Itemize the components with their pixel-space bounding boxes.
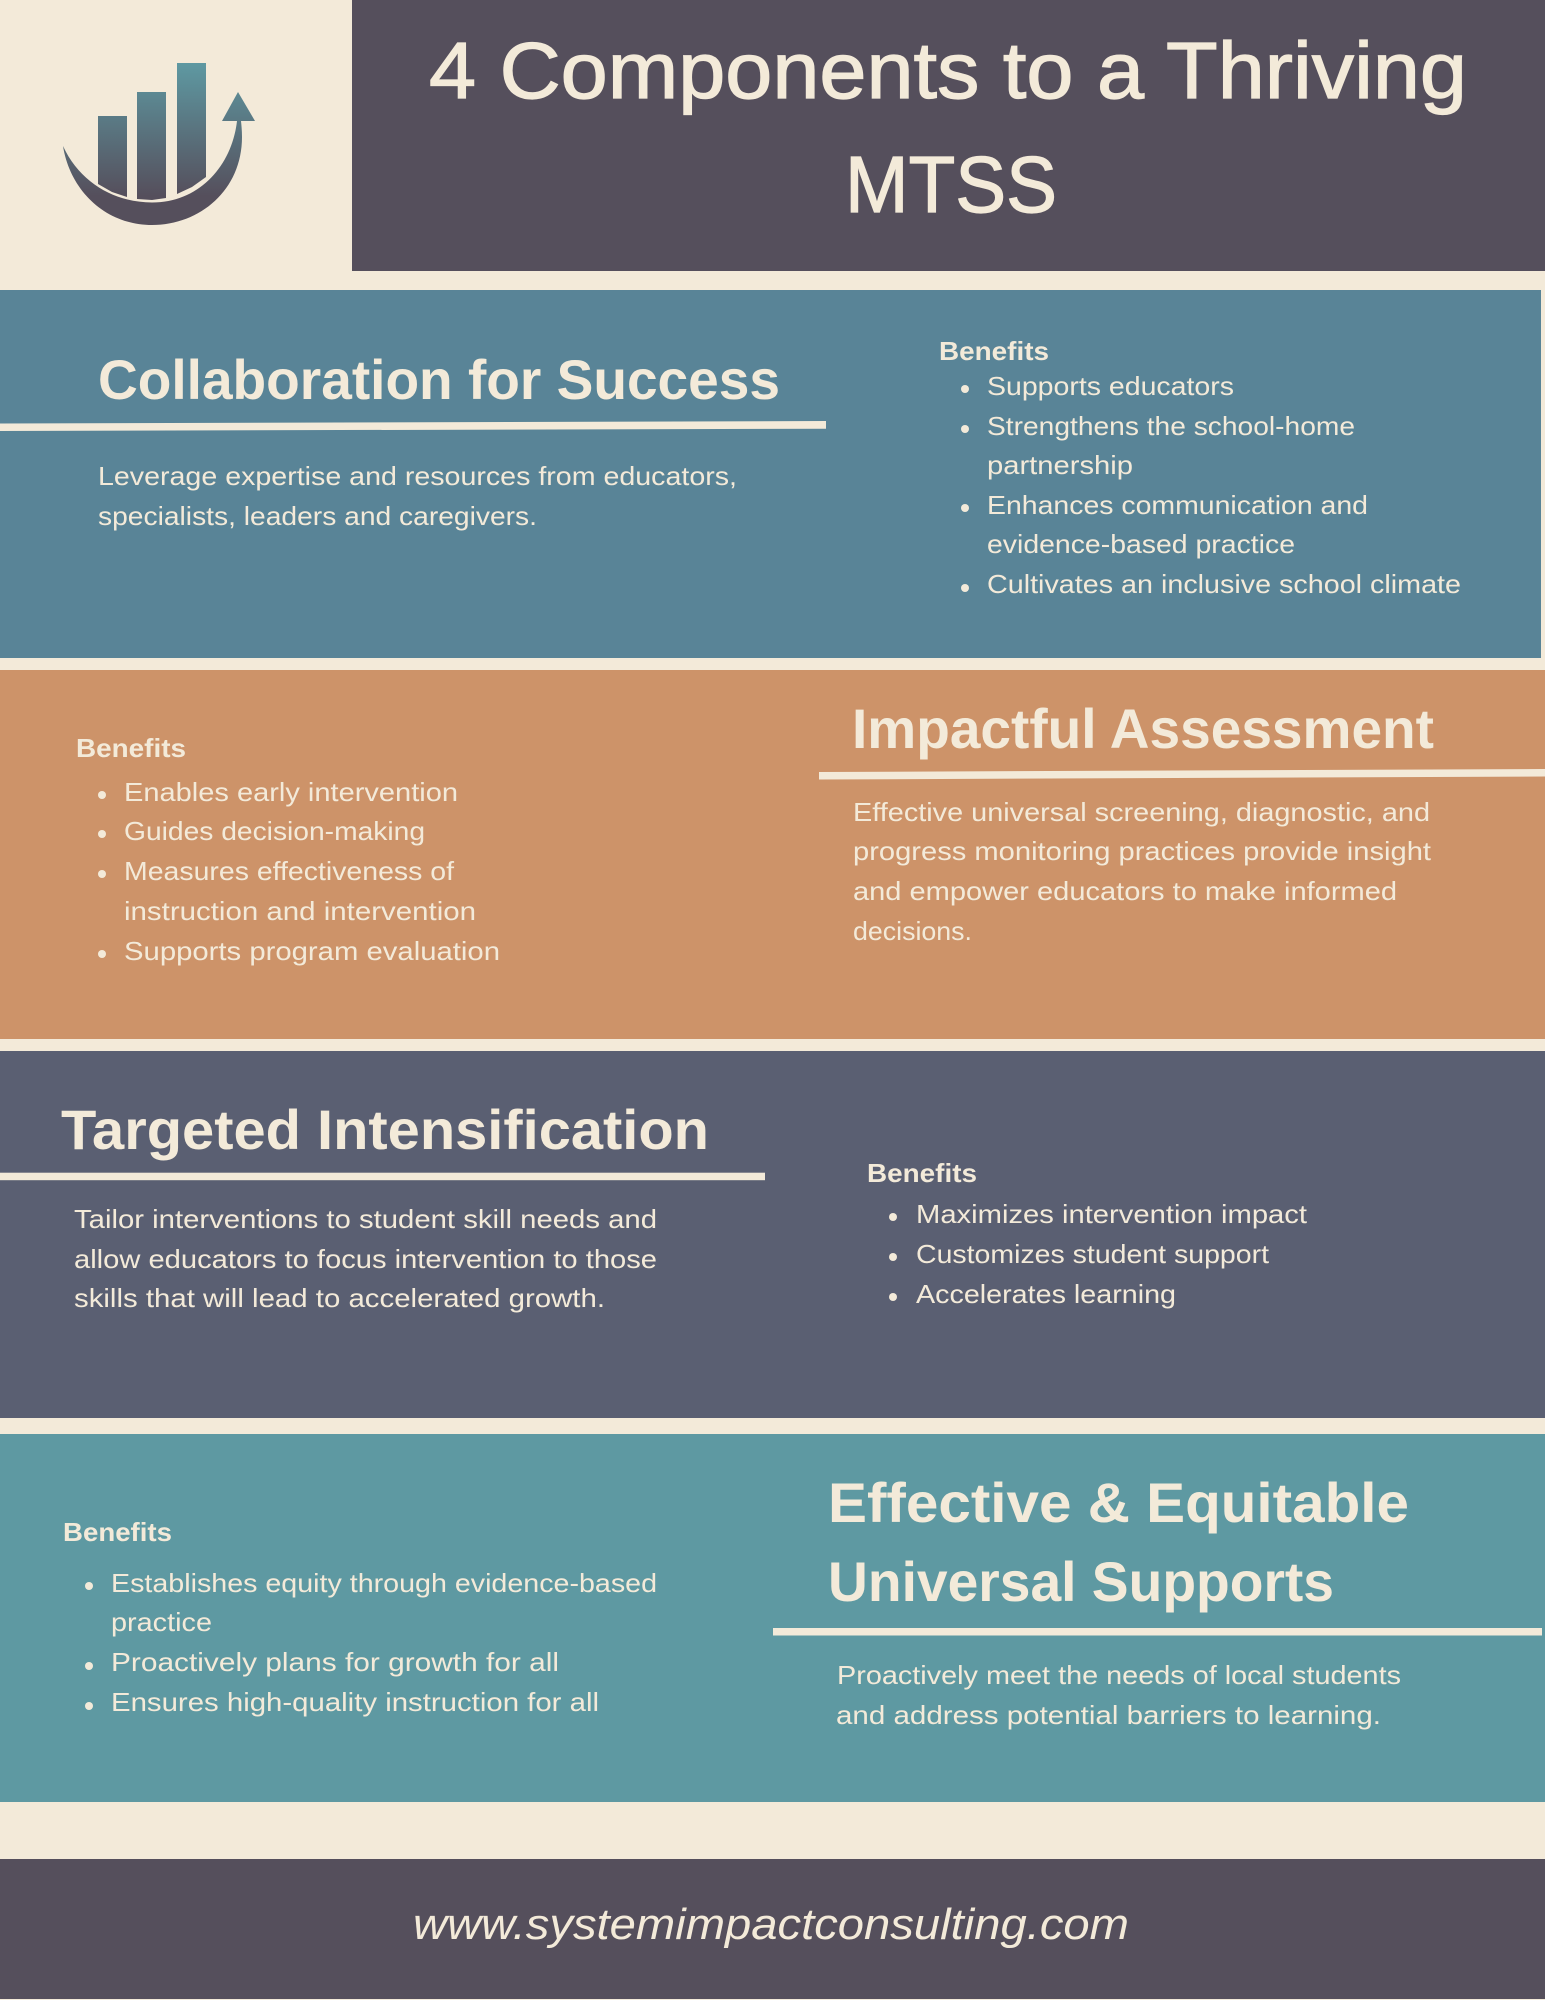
heading rule (773, 1628, 1542, 1636)
icon: logo with rising bars and arrow (63, 63, 255, 225)
description (74, 1204, 657, 1313)
heading: Impactful Assessment: Impactful Assessment (852, 697, 1434, 760)
description: Proactively meet the needs of local students (837, 1660, 1401, 1690)
heading rule (0, 1173, 765, 1180)
description: and empower educators to make informed (853, 876, 1397, 906)
benefits list: Guides decision-making (124, 816, 425, 846)
benefits list: Accelerates learning (916, 1279, 1176, 1309)
benefits list: Customizes student support (916, 1239, 1270, 1269)
benefits list: instruction and intervention (124, 896, 476, 926)
benefits list (76, 733, 500, 966)
benefits list: Enables early intervention (124, 777, 458, 807)
description: and address potential barriers to learning. (836, 1700, 1381, 1730)
benefits list: Establishes equity through evidence-based (111, 1568, 657, 1598)
title line 2: MTSS (845, 140, 1057, 229)
benefits list: Benefits (939, 336, 1049, 366)
heading: Effective and Equitable Universal Supports: Effective & Equitable (828, 1471, 1409, 1534)
benefits list: Benefits (867, 1158, 977, 1188)
benefits list: Enhances communication and (987, 490, 1368, 520)
heading: Effective and Equitable Universal Supports: Universal Supports (828, 1550, 1334, 1613)
heading: Collaboration for Success: Collaboration for Success (98, 348, 780, 411)
benefits list: Cultivates an inclusive school climate (987, 569, 1461, 599)
benefits list: practice (111, 1607, 212, 1637)
benefits list: Supports educators (987, 371, 1234, 401)
footer band (0, 1859, 1545, 1999)
benefits list: Ensures high-quality instruction for all (111, 1687, 599, 1717)
heading rule (0, 421, 826, 431)
description: allow educators to focus intervention to those (74, 1244, 657, 1274)
website URL: www.systemimpactconsulting.com (413, 1900, 1129, 1949)
benefits list: Benefits (63, 1517, 172, 1547)
description: skills that will lead to accelerated growth. (74, 1283, 605, 1313)
heading: Effective and Equitable Universal Supports (828, 1471, 1409, 1613)
description (853, 797, 1432, 946)
heading: Targeted Intensification: Targeted Intensification (61, 1098, 709, 1161)
description: Tailor interventions to student skill needs and (74, 1204, 657, 1234)
benefits list (939, 336, 1461, 599)
header banner (352, 0, 1545, 271)
benefits list (63, 1517, 657, 1717)
benefits list: Maximizes intervention impact (916, 1199, 1308, 1229)
panel: Targeted Intensification (0, 1051, 1545, 1418)
benefits list: Measures effectiveness of (124, 856, 455, 886)
description: Effective universal screening, diagnostic, and (853, 797, 1430, 827)
description: Leverage expertise and resources from educators, (98, 461, 737, 491)
title line 1: 4 Components to a Thriving (429, 26, 1467, 115)
description (98, 461, 737, 531)
description: decisions. (853, 916, 972, 946)
heading rule (819, 769, 1545, 780)
panel: Impactful Assessment (0, 670, 1545, 1039)
panel: Effective and Equitable Universal Supports (0, 1434, 1545, 1802)
benefits list: evidence-based practice (987, 529, 1295, 559)
benefits list: Benefits (76, 733, 186, 763)
description: progress monitoring practices provide insight (853, 836, 1432, 866)
description: specialists, leaders and caregivers. (98, 501, 537, 531)
benefits list: Proactively plans for growth for all (111, 1647, 559, 1677)
benefits list: Strengthens the school-home (987, 411, 1355, 441)
benefits list (867, 1158, 1308, 1309)
benefits list: partnership (987, 450, 1133, 480)
description (836, 1660, 1401, 1730)
benefits list: Supports program evaluation (124, 936, 500, 966)
panel: Collaboration for Success (0, 290, 1541, 658)
